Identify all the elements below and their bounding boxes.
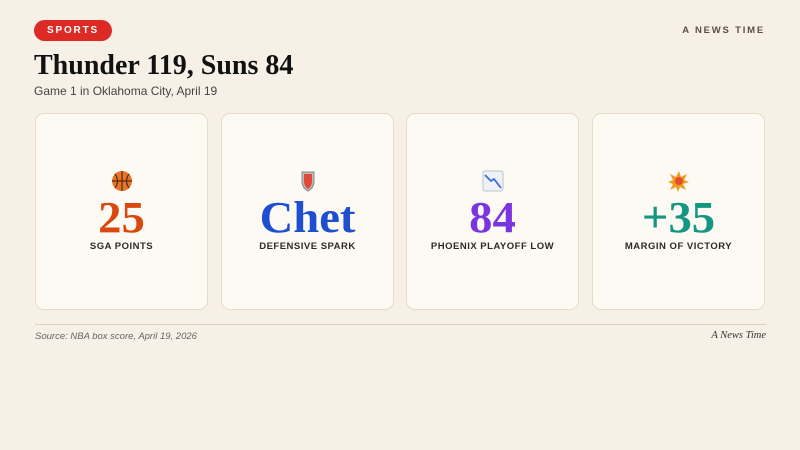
label: DEFENSIVE SPARK (259, 241, 356, 252)
stat: +35 (642, 193, 715, 242)
card: Chet (221, 113, 394, 310)
label: SGA POINTS (90, 241, 153, 252)
brand: A NEWS TIME (682, 25, 765, 36)
label: MARGIN OF VICTORY (625, 241, 732, 252)
card: Phoenix low (406, 113, 579, 310)
badge: sports (34, 20, 112, 41)
icon: basketball (112, 171, 132, 191)
icon: chart down (482, 170, 504, 192)
source: Source: NBA box score, April 19, 2026 (35, 331, 197, 342)
stat: Chet (260, 193, 355, 242)
title: Thunder 119, Suns 84 (34, 50, 293, 81)
subtitle: Game 1 in Oklahoma City, April 19 (34, 84, 217, 98)
label: PHOENIX PLAYOFF LOW (431, 241, 554, 252)
card: SGA points (35, 113, 208, 310)
badge: sports: SPORTS (47, 25, 99, 36)
icon: shield (302, 172, 314, 192)
stat: 84 (469, 193, 516, 242)
card: margin (592, 113, 765, 310)
footer brand: A News Time (711, 330, 766, 341)
icon: collision (668, 171, 689, 192)
stat: 25 (98, 193, 145, 242)
